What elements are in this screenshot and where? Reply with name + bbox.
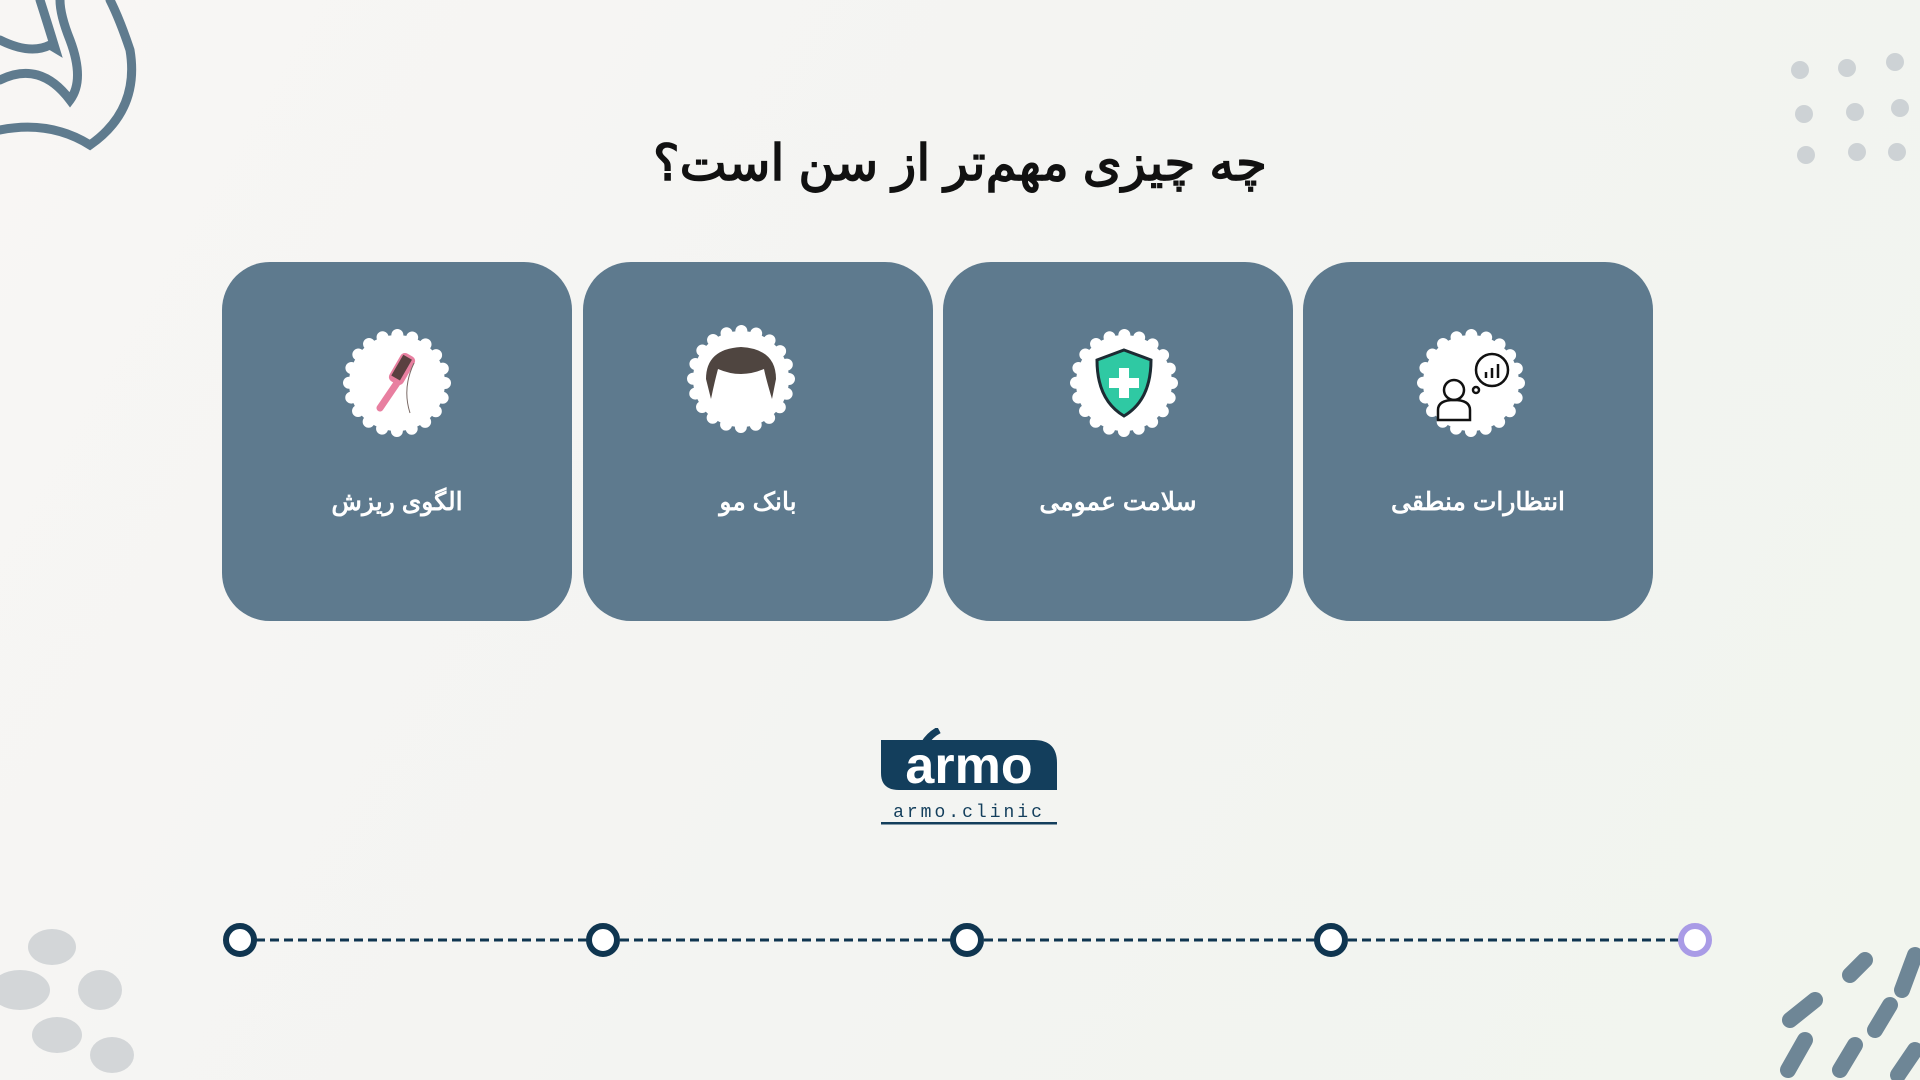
- logo: armo clinic: armo: [905, 737, 1033, 795]
- icon: hairbrush: [343, 329, 451, 437]
- panel: hair bank: [583, 262, 933, 621]
- panel: general health: [943, 262, 1293, 621]
- panel: realistic expectations: [1303, 262, 1653, 621]
- logo: armo clinic: [881, 728, 1057, 824]
- label: سلامت عمومی: [1039, 488, 1197, 516]
- timeline: [223, 923, 1712, 957]
- logo: armo clinic: armo.clinic: [893, 803, 1045, 823]
- icon: shield: [1070, 329, 1178, 437]
- title: چه چیزی مهم‌تر از سن است؟: [653, 135, 1267, 191]
- label: الگوی ریزش: [331, 488, 463, 516]
- decoration: blobs bottom-left: [0, 929, 134, 1073]
- icon: hair: [687, 325, 795, 433]
- decoration: dashes bottom-right: [1780, 947, 1920, 1080]
- decoration: dot grid top-right: [1791, 53, 1909, 164]
- label: انتظارات منطقی: [1391, 488, 1565, 516]
- decoration: swirl top-left: [0, 0, 136, 150]
- label: بانک مو: [719, 488, 797, 516]
- icon: thinking person: [1417, 329, 1525, 437]
- panel: hair loss pattern: [222, 262, 572, 621]
